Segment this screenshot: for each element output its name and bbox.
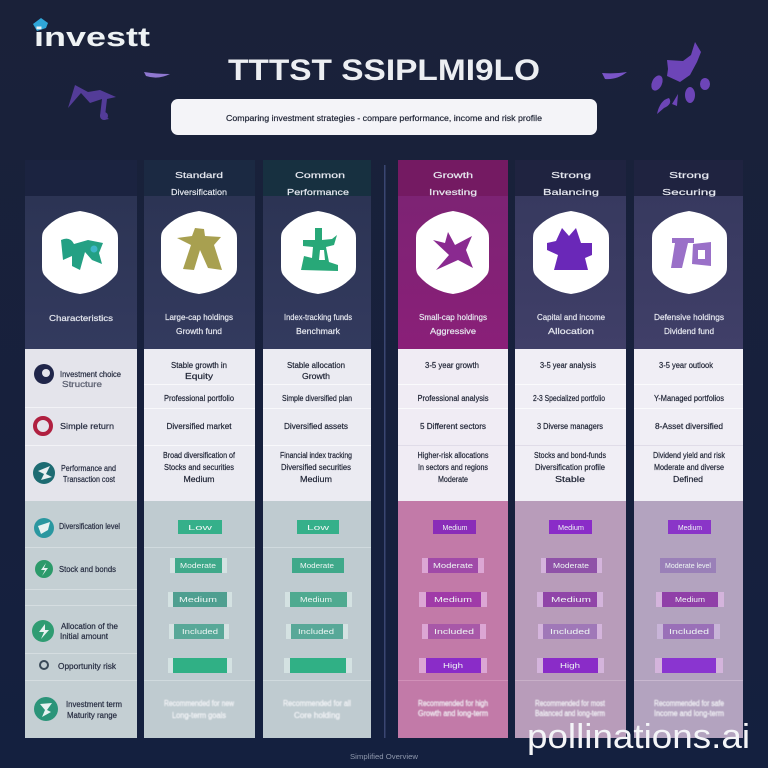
panel: strategy column 5 xyxy=(634,160,743,738)
cell text rows: Defined xyxy=(673,475,703,484)
icon: hexagon xyxy=(652,211,727,294)
row: risk xyxy=(35,418,114,434)
cell text rows: Broad diversification of xyxy=(163,451,236,460)
cell text rows: Dividend yield and risk xyxy=(653,451,726,460)
row: allocation xyxy=(32,620,119,642)
badges: Included xyxy=(182,627,218,636)
badges: Moderate level xyxy=(665,561,711,570)
badges: Medium xyxy=(675,595,705,604)
badges: Medium xyxy=(678,523,702,532)
cell text rows xyxy=(163,361,236,484)
cell text rows: 3-5 year growth xyxy=(425,361,479,370)
row: liquidity: Transaction cost xyxy=(63,475,116,484)
caption: Growth fund xyxy=(176,326,222,336)
row: investment choice: Investment choice xyxy=(60,370,122,379)
row: allocation: Initial amount xyxy=(60,632,109,641)
cell text rows: 3-5 year analysis xyxy=(540,361,596,370)
badges: Low xyxy=(188,523,213,532)
caption xyxy=(654,312,724,336)
panel: strategy column 1 xyxy=(144,160,255,738)
icon: hexagon xyxy=(416,211,489,294)
row: liquidity: Performance and xyxy=(61,464,116,473)
column heading xyxy=(287,170,349,197)
badges: Moderate xyxy=(180,561,216,570)
row: allocation: Allocation of the xyxy=(61,622,119,631)
cell text rows: Moderate xyxy=(438,475,468,484)
caption: Dividend fund xyxy=(664,326,714,336)
badges: Medium xyxy=(179,595,217,604)
cell footer: Recommended for high xyxy=(418,699,488,708)
caption: Capital and income xyxy=(537,312,605,322)
column heading xyxy=(429,170,477,197)
row: return xyxy=(34,518,120,538)
cell footer xyxy=(418,699,488,718)
footer note: Simplified Overview xyxy=(350,752,419,761)
cell text rows: Diversified assets xyxy=(284,422,348,431)
icon: criteria hexagon xyxy=(42,211,118,294)
badges: Low xyxy=(307,523,330,532)
cell footer: Income and long-term xyxy=(654,709,724,718)
row: growth: Stock and bonds xyxy=(59,565,116,574)
column heading xyxy=(543,170,599,197)
column heading: Standard xyxy=(175,170,223,180)
cell text rows: 8-Asset diversified xyxy=(655,422,723,431)
badges: Moderate xyxy=(553,561,589,570)
cell footer: Growth and long-term xyxy=(418,709,488,718)
cell text rows xyxy=(280,361,352,484)
caption: Aggressive xyxy=(430,326,476,336)
badges: Included xyxy=(550,627,590,636)
column heading: Strong xyxy=(669,170,709,180)
watermark: pollinations.ai xyxy=(527,718,750,756)
row: duration: Investment term xyxy=(66,700,122,709)
badges xyxy=(168,520,232,673)
column heading: Investing xyxy=(429,187,477,197)
row: duration: Maturity range xyxy=(67,711,118,720)
icon: hexagon xyxy=(281,211,356,294)
cell footer xyxy=(654,699,724,718)
row: risk: Simple return xyxy=(60,422,114,431)
cell text rows: 2-3 Specialized portfolio xyxy=(533,394,605,403)
cell text rows: Stocks and securities xyxy=(164,463,234,472)
logo: investt xyxy=(34,22,150,52)
cell footer: Balanced and long-term xyxy=(535,709,605,718)
cell footer: Recommended for all xyxy=(283,699,351,708)
panel: strategy column 3 xyxy=(398,160,508,738)
badges: Medium xyxy=(434,595,472,604)
center divider xyxy=(384,165,386,738)
row: investment choice xyxy=(34,364,122,389)
cell text rows: Moderate and diverse xyxy=(654,463,724,472)
badges: Included xyxy=(298,627,334,636)
cell footer: Long-term goals xyxy=(172,711,226,720)
cell text rows: Y-Managed portfolios xyxy=(654,394,724,403)
icon: hexagon xyxy=(161,211,237,294)
cell text rows: Stable growth in xyxy=(171,361,227,370)
cell footer: Core holding xyxy=(294,711,340,720)
cell text rows: Stable allocation xyxy=(287,361,345,370)
cell text rows: In sectors and regions xyxy=(418,463,488,472)
caption xyxy=(284,312,352,336)
badges xyxy=(419,520,487,673)
criteria caption: Characteristics xyxy=(49,313,113,323)
caption: Allocation xyxy=(548,326,594,336)
cell text rows: Stocks and bond-funds xyxy=(534,451,606,460)
caption: Index-tracking funds xyxy=(284,312,352,322)
column heading: Diversification xyxy=(171,187,227,197)
badges: Included xyxy=(669,627,709,636)
icon: right music note decoration xyxy=(649,42,710,114)
cell text rows: Growth xyxy=(302,372,330,381)
cell footer xyxy=(535,699,606,718)
caption: Large-cap holdings xyxy=(165,312,233,322)
row: growth xyxy=(35,560,116,578)
cell text rows: 5 Different sectors xyxy=(420,422,486,431)
cell text rows: Professional portfolio xyxy=(164,394,235,403)
panel: strategy column 2 xyxy=(263,160,371,738)
column heading: Securing xyxy=(662,187,716,197)
subtitle bar: Comparing investment strategies - compare performance, income and risk profile xyxy=(226,113,542,123)
cell footer: Recommended for safe xyxy=(654,699,724,708)
badges: Moderate xyxy=(433,561,473,570)
cell text rows: Higher-risk allocations xyxy=(418,451,488,460)
badges xyxy=(655,520,724,673)
cell text rows: 3-5 year outlook xyxy=(659,361,714,370)
cell text rows: Equity xyxy=(185,372,213,381)
cell text rows: Financial index tracking xyxy=(280,451,352,460)
caption xyxy=(419,312,487,336)
cell text rows: Simple diversified plan xyxy=(282,394,352,403)
row: options: Opportunity risk xyxy=(58,662,117,671)
cell text rows: Diversified market xyxy=(166,422,232,431)
row: duration xyxy=(34,697,122,721)
caption xyxy=(165,312,233,336)
column heading: Balancing xyxy=(543,187,599,197)
title: TTTST SSIPLMI9LO xyxy=(228,54,540,87)
panel: criteria column xyxy=(25,160,137,738)
cell text rows: Diversified securities xyxy=(281,463,351,472)
icon: hexagon xyxy=(533,211,609,294)
cell text rows: 3 Diverse managers xyxy=(537,422,603,431)
cell text rows: Professional analysis xyxy=(418,394,488,403)
subtitle bar xyxy=(171,99,597,135)
caption: Defensive holdings xyxy=(654,312,724,322)
column heading: Performance xyxy=(287,187,349,197)
cell text rows: Medium xyxy=(184,475,215,484)
badges xyxy=(284,520,352,673)
column heading xyxy=(171,170,227,197)
column heading xyxy=(662,170,716,197)
logo xyxy=(33,18,150,52)
cell footer xyxy=(283,699,351,720)
badges: High xyxy=(443,661,463,670)
badges: Medium xyxy=(300,595,332,604)
cell text rows: Medium xyxy=(300,475,332,484)
badges: Moderate xyxy=(300,561,334,570)
badges: High xyxy=(560,661,580,670)
caption: Small-cap holdings xyxy=(419,312,487,322)
badges xyxy=(537,520,604,673)
badges: Medium xyxy=(442,523,468,532)
panel: strategy column 4 xyxy=(515,160,626,738)
cell text rows: Stable xyxy=(555,475,586,484)
left dash decoration xyxy=(144,72,170,78)
cell text rows xyxy=(533,361,606,484)
icon: left music note decoration xyxy=(68,85,116,120)
row: liquidity xyxy=(33,462,116,484)
column heading: Strong xyxy=(551,170,591,180)
column heading: Common xyxy=(295,170,345,180)
cell text rows xyxy=(653,361,726,484)
cell footer: Recommended for new xyxy=(164,699,234,708)
cell text rows: Diversification profile xyxy=(535,463,606,472)
caption: Benchmark xyxy=(296,326,341,336)
badges: Medium xyxy=(551,595,591,604)
badges: Included xyxy=(434,627,474,636)
row: investment choice: Structure xyxy=(62,380,103,389)
right dash decoration xyxy=(602,72,627,79)
caption xyxy=(537,312,605,336)
cell text rows xyxy=(418,361,488,484)
column heading: Growth xyxy=(433,170,473,180)
row: options xyxy=(40,661,117,671)
row: return: Diversification level xyxy=(59,522,120,531)
badges: Medium xyxy=(558,523,584,532)
cell footer xyxy=(164,699,234,720)
cell footer: Recommended for most xyxy=(535,699,606,708)
